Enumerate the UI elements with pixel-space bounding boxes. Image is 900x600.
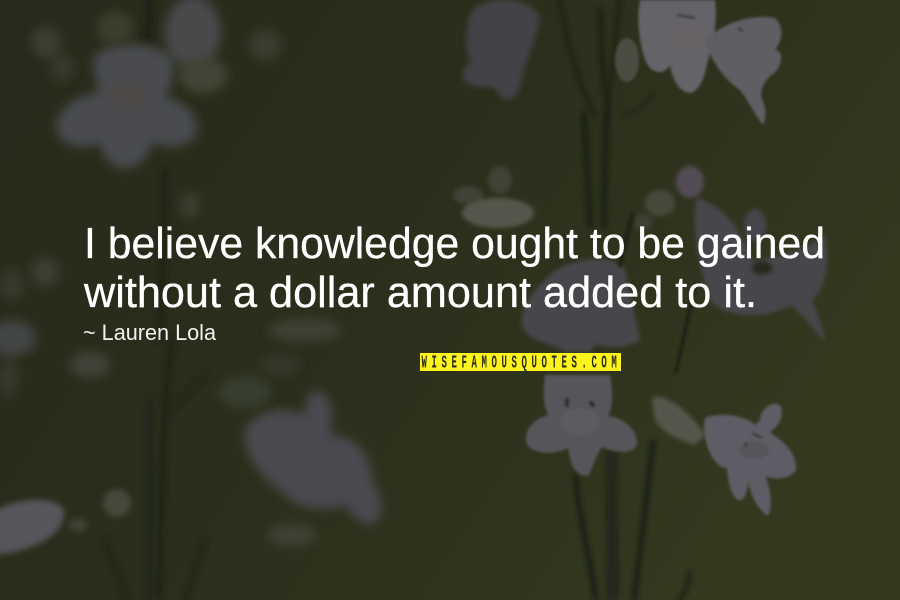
quote line 2: without a dollar amount added to it. bbox=[83, 268, 757, 317]
ghost flower, top centre bbox=[463, 0, 540, 100]
blurred buds, left side bbox=[0, 192, 341, 408]
flower, lower right bbox=[704, 404, 796, 516]
dark stem between centre and right flowers bbox=[620, 215, 695, 372]
flower, right of centre bbox=[676, 166, 827, 342]
watermark badge: WISEFAMOUSQUOTES.COM bbox=[422, 354, 621, 374]
flower, top right pair bbox=[638, 0, 781, 125]
author attribution: ~ Lauren Lola bbox=[83, 320, 217, 345]
blurred stems on the left bbox=[105, 0, 205, 600]
bud, lower right bbox=[652, 397, 705, 445]
flower, centre behind text bbox=[522, 259, 640, 352]
blurred flower, lower left bbox=[244, 391, 382, 546]
blurred buds, upper left bbox=[31, 12, 281, 93]
quote line 1: I believe knowledge ought to be gained bbox=[84, 219, 825, 268]
buds, centre cluster bbox=[453, 166, 675, 230]
bud, top centre bbox=[615, 38, 639, 82]
stems, top centre bbox=[560, 0, 653, 225]
stems, lower right bbox=[575, 440, 690, 600]
blurred flower, bottom edge left bbox=[0, 489, 131, 555]
quote text bbox=[83, 219, 825, 317]
blurred flower, upper left bbox=[56, 0, 221, 168]
flower, lower centre bbox=[526, 375, 637, 476]
